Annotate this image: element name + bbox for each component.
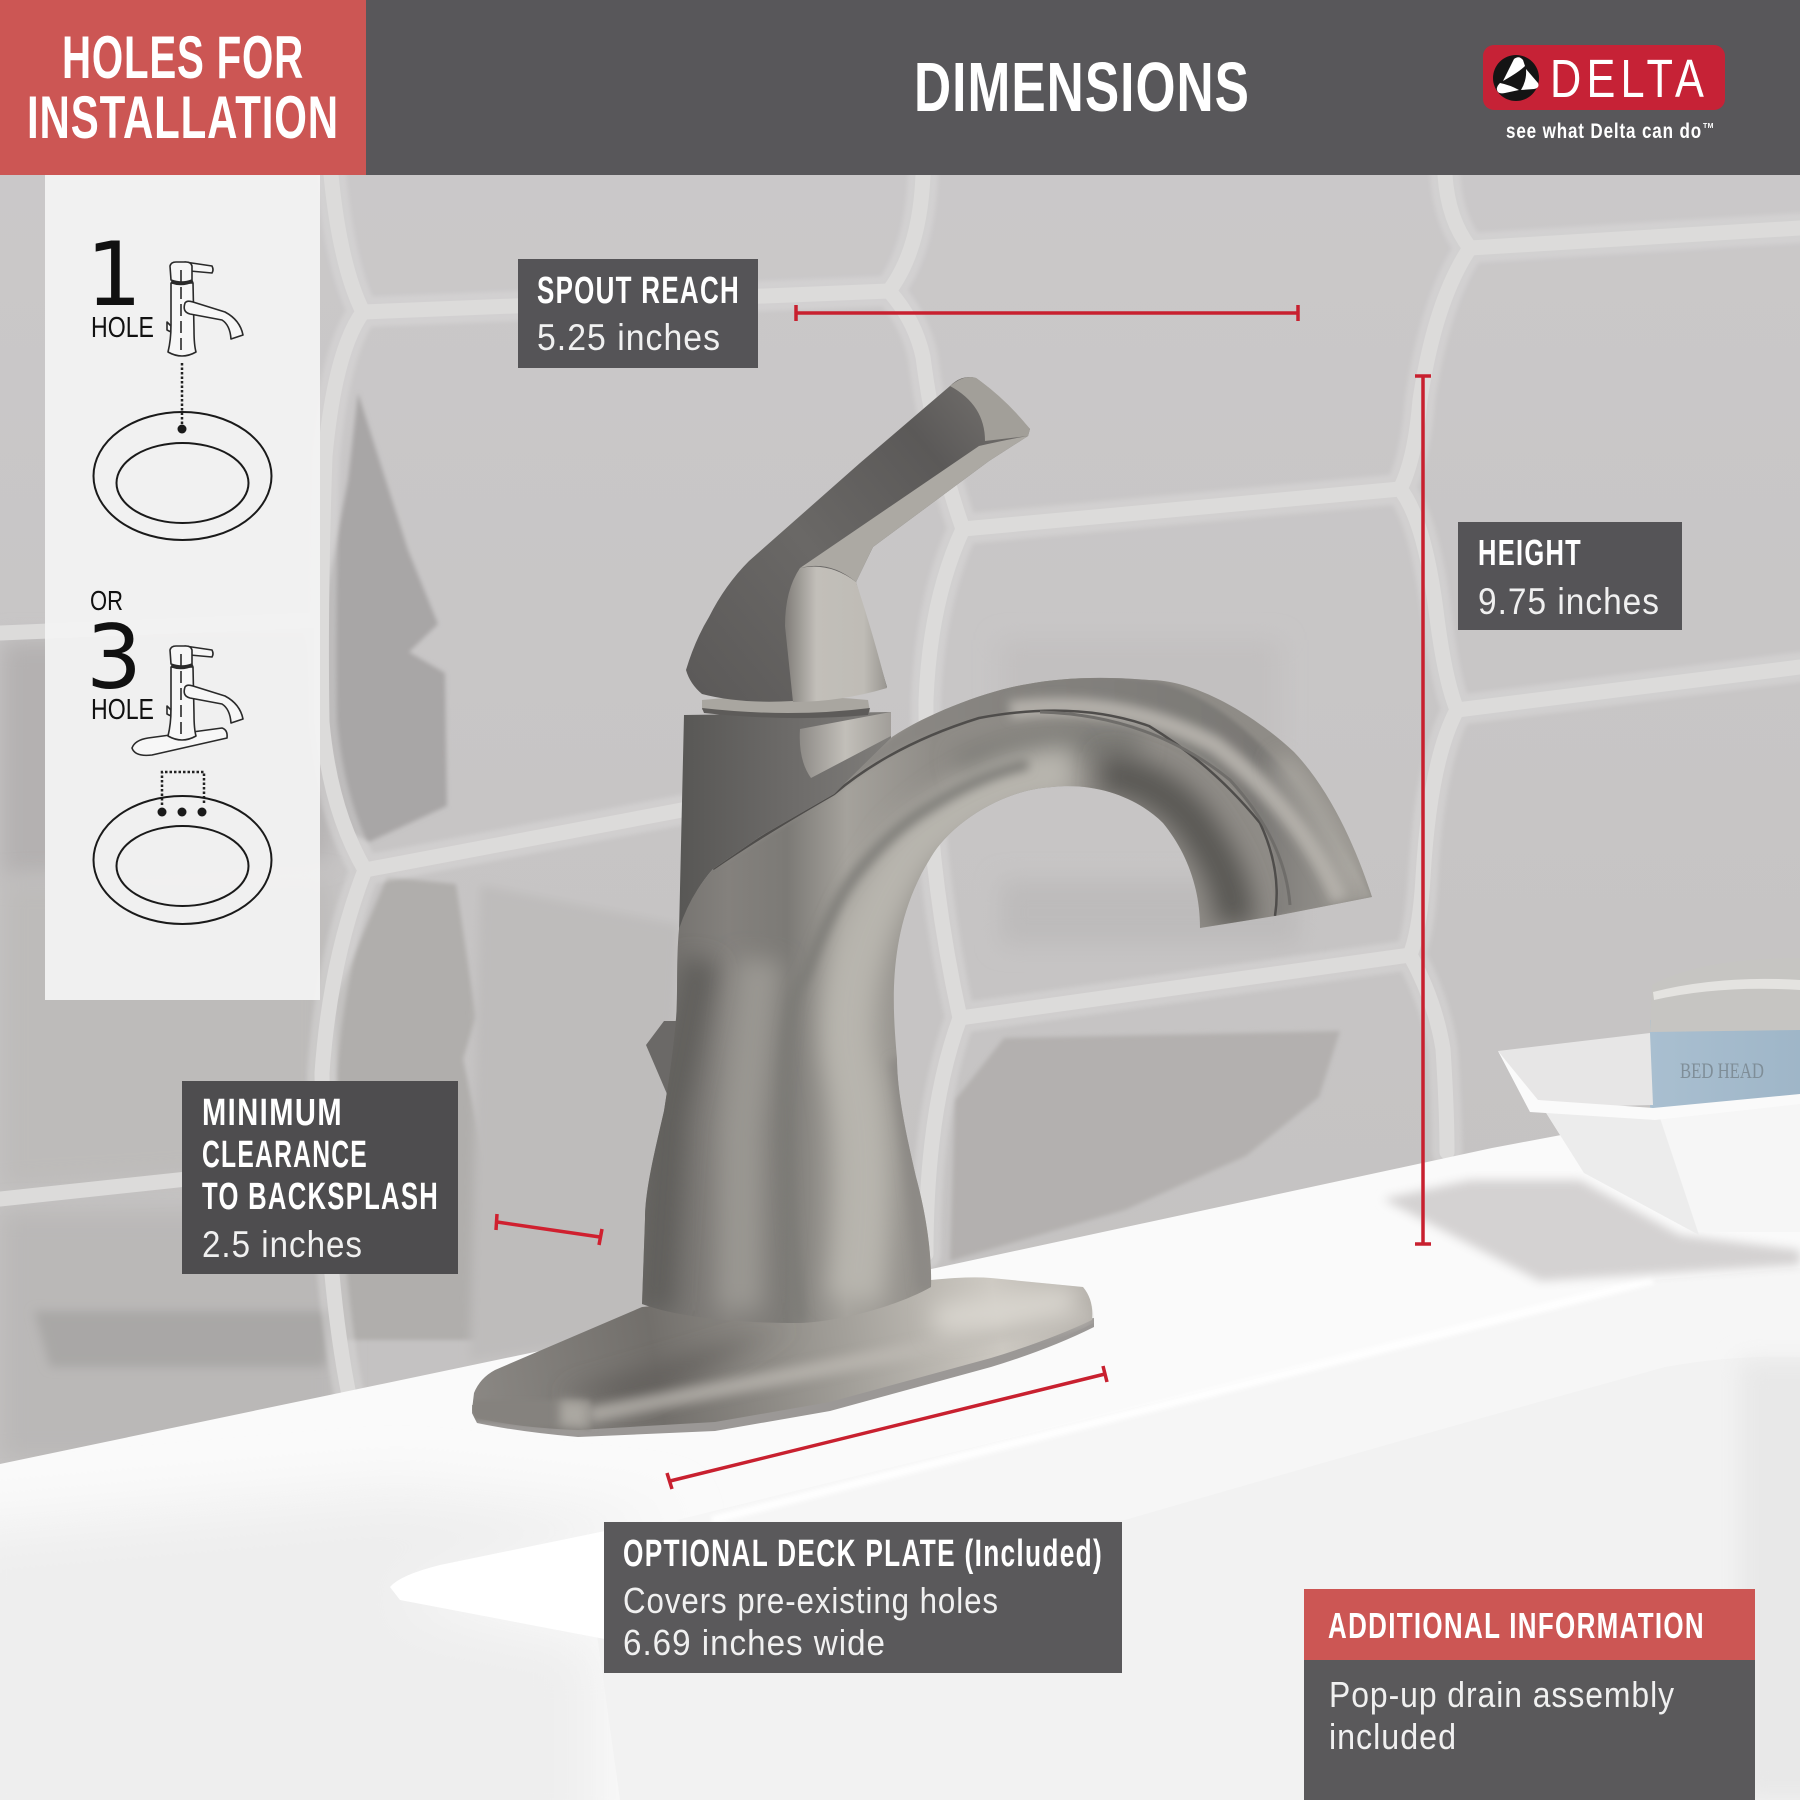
wall reflections xyxy=(0,393,1340,1460)
countertop and basin xyxy=(0,1090,1800,1800)
icon: one hole basin xyxy=(94,412,272,540)
deck plate xyxy=(472,1277,1094,1437)
callout: height: HEIGHT xyxy=(1478,532,1582,573)
panel: holes for installation heading xyxy=(0,0,366,175)
one hole option xyxy=(86,223,272,540)
counter soft shading xyxy=(0,1490,680,1800)
one hole option: HOLE xyxy=(91,312,154,344)
panel: holes for installation heading: HOLES FOR xyxy=(62,24,304,91)
callout: spout reach: SPOUT REACH xyxy=(537,270,740,312)
callout: minimum clearance xyxy=(182,1081,458,1274)
tray and jar xyxy=(1498,958,1800,1235)
callout: minimum clearance: MINIMUM xyxy=(202,1092,343,1134)
icon: faucet with deck plate xyxy=(132,646,243,755)
logo: Delta: DELTA xyxy=(1550,49,1709,109)
callout: additional information: included xyxy=(1329,1716,1457,1757)
callout: minimum clearance: TO BACKSPLASH xyxy=(202,1176,439,1218)
three hole option: HOLE xyxy=(91,694,154,726)
jar: BED HEAD xyxy=(1680,1058,1764,1083)
title: dimensions: DIMENSIONS xyxy=(914,48,1250,126)
icon: dotted drop lines xyxy=(162,772,204,805)
callout: additional information: Pop-up drain assembly xyxy=(1329,1674,1675,1715)
callout: optional deck plate: 6.69 inches wide xyxy=(623,1622,886,1663)
callout: optional deck plate: OPTIONAL DECK PLATE (Included) xyxy=(623,1533,1103,1575)
faucet upper body xyxy=(679,712,891,932)
tray xyxy=(1498,1033,1653,1108)
icon: three hole basin xyxy=(94,796,272,924)
tray shadow xyxy=(1383,1180,1800,1281)
dimension line: backsplash clearance xyxy=(496,1214,602,1245)
callout: minimum clearance: 2.5 inches xyxy=(202,1224,363,1265)
faucet spout and base xyxy=(642,676,1372,1323)
dimension line: deck plate xyxy=(667,1366,1107,1489)
three hole option: 3 xyxy=(86,606,142,709)
callout: height xyxy=(1458,522,1682,630)
handle xyxy=(686,377,1030,702)
panel: holes for installation heading: INSTALLATION xyxy=(27,84,339,151)
dimension line: height xyxy=(1415,376,1431,1244)
logo: Delta: see what Delta can do xyxy=(1506,120,1702,143)
basin xyxy=(390,1357,1800,1800)
handle ring xyxy=(702,696,870,718)
jar xyxy=(1650,958,1800,1110)
callout: minimum clearance: CLEARANCE xyxy=(202,1134,368,1176)
pop-up knob xyxy=(646,1021,682,1115)
callout: optional deck plate: Covers pre-existing holes xyxy=(623,1580,999,1621)
icon: faucet line drawing xyxy=(167,262,243,356)
one hole option: 1 xyxy=(86,223,142,326)
header bar xyxy=(0,0,1800,175)
callout: optional deck plate xyxy=(604,1522,1122,1673)
faucet xyxy=(472,377,1372,1437)
logo: Delta xyxy=(1483,45,1725,143)
connector block xyxy=(800,712,891,778)
callout: height: 9.75 inches xyxy=(1478,581,1660,622)
dimension line: spout reach xyxy=(796,305,1298,321)
grout lines xyxy=(321,175,1800,1400)
callout: spout reach: 5.25 inches xyxy=(537,317,721,358)
panel: hole diagrams xyxy=(45,175,320,1000)
logo: Delta: TM xyxy=(1703,123,1714,130)
three hole option: OR xyxy=(90,585,123,616)
three hole option xyxy=(86,585,272,924)
callout: additional information xyxy=(1304,1589,1755,1800)
callout: spout reach xyxy=(518,259,758,368)
icon: dotted drop line xyxy=(181,363,183,425)
